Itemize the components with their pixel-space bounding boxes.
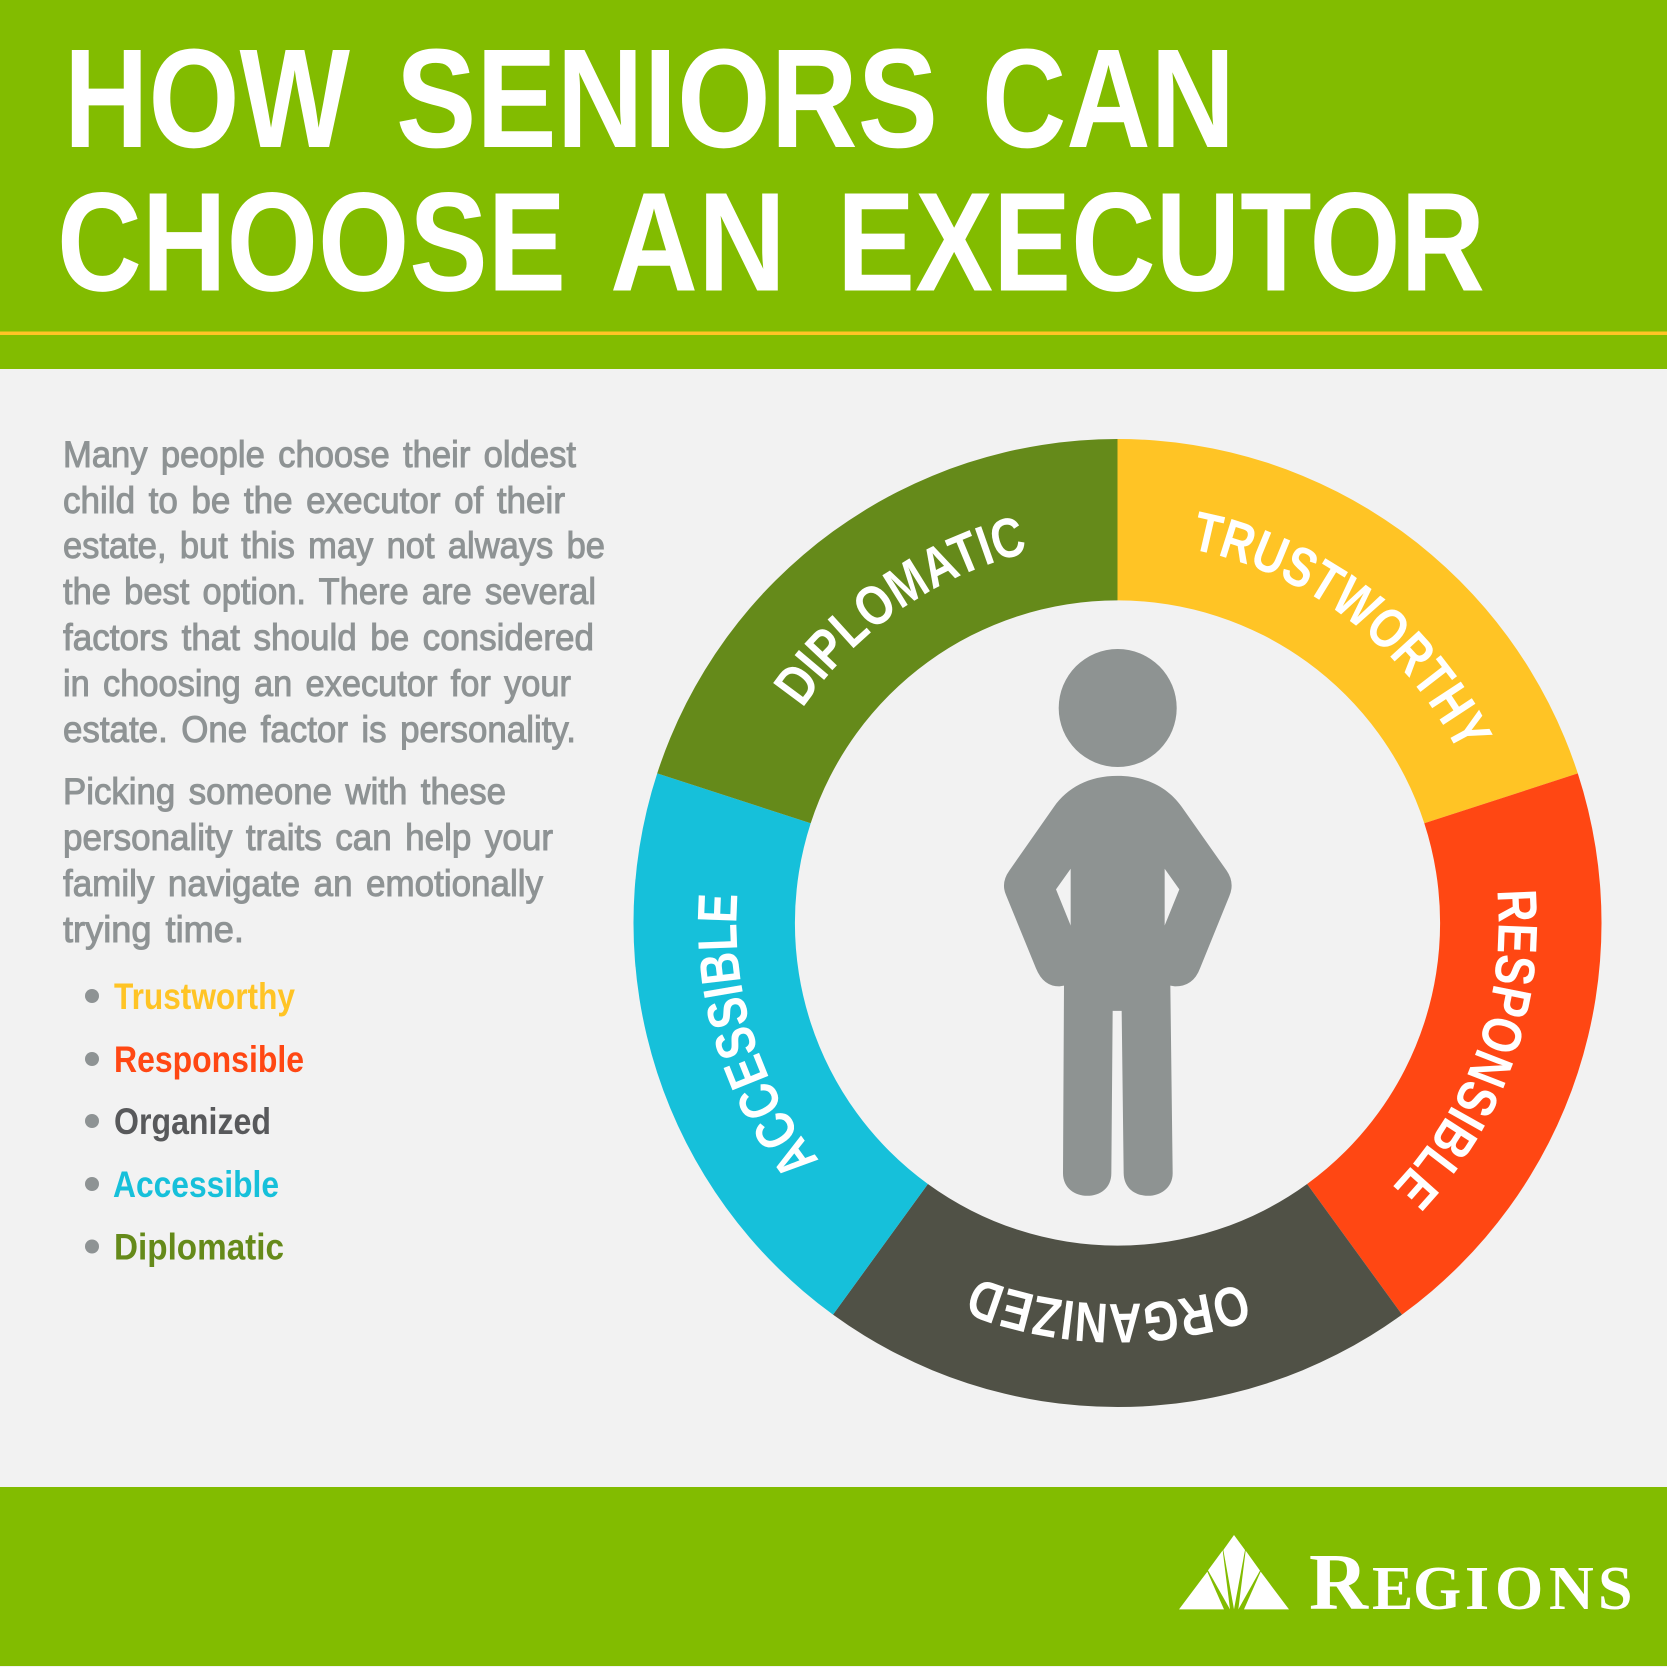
- trait list: Organized: [114, 1100, 271, 1142]
- label: trustworthy: TRUSTWORTHY: [1198, 511, 1493, 744]
- trait list: Trustworthy: [114, 975, 295, 1017]
- segment: organized: [833, 1184, 1402, 1407]
- title: HOW: [64, 19, 350, 177]
- intro text block: in choosing an executor for your: [63, 663, 571, 704]
- label: diplomatic: DIPLOMATIC: [773, 518, 1024, 706]
- icon: Regions pyramid: [1179, 1535, 1289, 1609]
- intro text block: child to be the executor of their: [63, 480, 565, 521]
- second paragraph: family navigate an emotionally: [63, 863, 543, 904]
- trait list: Responsible: [114, 1038, 304, 1080]
- header band: [0, 0, 1667, 369]
- trait list: Diplomatic: [114, 1226, 284, 1268]
- intro text block: estate. One factor is personality.: [63, 709, 576, 750]
- second paragraph: Picking someone with these: [63, 771, 506, 812]
- icon: standing person: [1004, 649, 1232, 1196]
- title: EXECUTOR: [837, 162, 1485, 320]
- intro text block: the best option. There are several: [63, 571, 596, 612]
- label: accessible: ACCESSIBLE: [698, 895, 818, 1174]
- wordmark: R: [1309, 1537, 1370, 1627]
- intro text block: factors that should be considered: [63, 617, 594, 658]
- intro text block: [63, 434, 605, 750]
- trait list: Accessible: [113, 1163, 279, 1205]
- title: CHOOSE: [57, 162, 566, 320]
- second paragraph: personality traits can help your: [63, 817, 553, 858]
- second paragraph: [63, 771, 553, 950]
- title: AN: [610, 162, 786, 320]
- title: CAN: [982, 19, 1235, 177]
- intro text block: Many people choose their oldest: [63, 434, 577, 475]
- title: SENIORS: [396, 19, 938, 177]
- footer band: [0, 1487, 1667, 1666]
- segment: diplomatic: [657, 439, 1118, 823]
- second paragraph: trying time.: [63, 909, 244, 950]
- intro text block: estate, but this may not always be: [63, 525, 605, 566]
- wordmark: EGIONS: [1372, 1555, 1632, 1623]
- logo: Regions: [1179, 1535, 1632, 1627]
- label: responsible: RESPONSIBLE: [1393, 892, 1538, 1212]
- segment: accessible: [633, 773, 928, 1315]
- trait list: [85, 975, 304, 1268]
- segment: responsible: [1307, 773, 1602, 1315]
- label: organized: ORGANIZED: [970, 1282, 1248, 1342]
- title: [57, 19, 1485, 320]
- trait ring: [634, 439, 1602, 1407]
- segment: trustworthy: [1118, 439, 1578, 823]
- wordmark: [1309, 1537, 1632, 1627]
